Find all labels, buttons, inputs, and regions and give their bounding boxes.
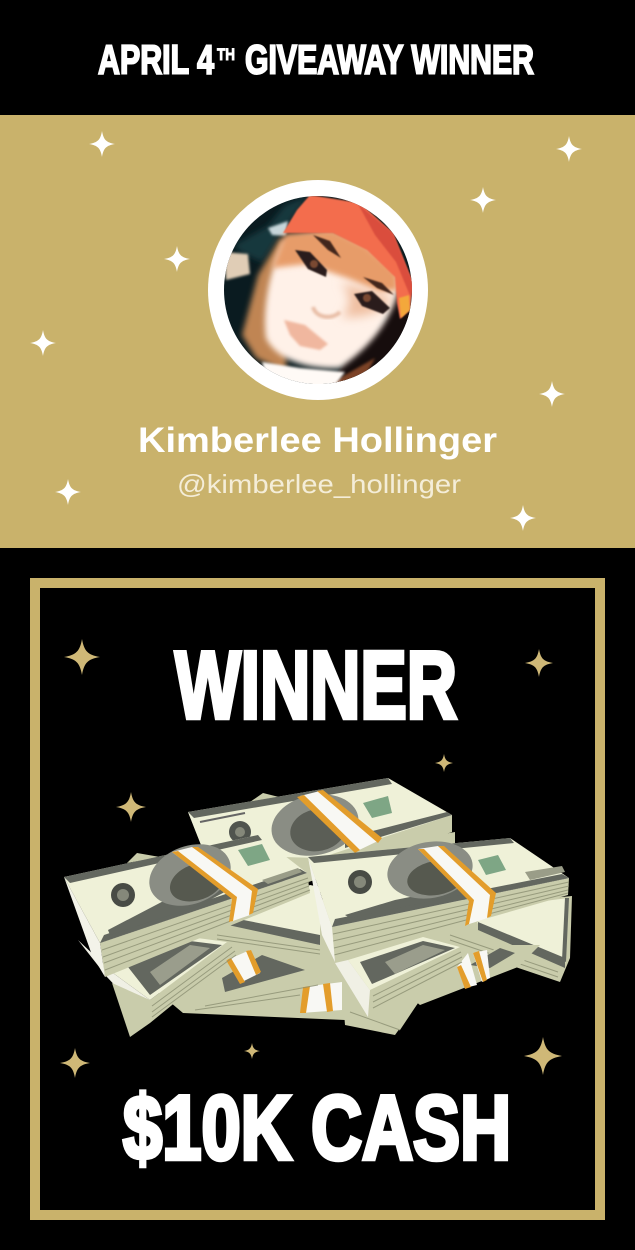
lower right front stack [335,937,463,1035]
heading: prize: $10K CASH [123,1078,511,1179]
winner handle: @kimberlee_hollinger [177,469,461,499]
title: TH [217,45,235,64]
hair right [331,299,410,384]
base fill behind the pile [120,900,520,1030]
winner portrait [208,180,428,400]
panel: winner profile [0,115,635,548]
icons: gold sparkles [60,639,562,1078]
heading: winner: WINNER [175,632,457,739]
illustration: cash stacks [64,778,572,1037]
lower right stack [450,896,572,982]
right under stack with bands [410,945,540,1005]
hair left [242,238,295,372]
title [98,36,534,82]
center lower stacks [183,950,345,1013]
hat [283,195,413,319]
forehead shade [272,230,398,292]
title: GIVEAWAY WINNER [245,36,534,82]
neck and shirt [260,360,346,384]
back stack [188,778,455,885]
icons: white sparkles [30,131,582,531]
winner name: Kimberlee Hollinger [138,421,497,460]
lower left stack [78,937,237,1037]
panel: prize frame [35,583,600,1215]
mid stack behind left stack [217,885,320,958]
car interior [234,195,310,262]
nose [313,307,340,317]
front right stack [308,835,569,962]
front left stack [64,833,310,977]
brows [313,235,341,258]
eyes [295,250,327,277]
face [265,232,400,368]
title: APRIL 4 [98,36,214,82]
lips [284,320,328,350]
